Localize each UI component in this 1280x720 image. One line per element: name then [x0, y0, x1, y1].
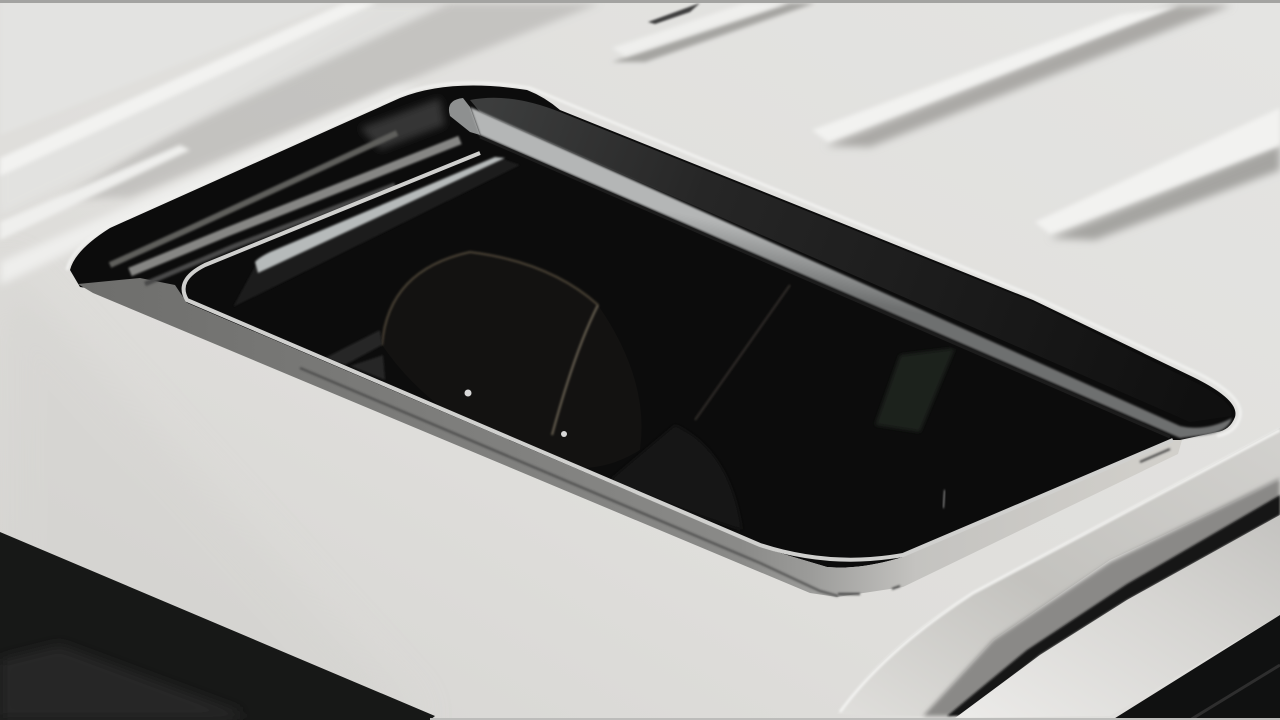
recess white rim: [67, 83, 1240, 436]
small interior glint: [943, 490, 945, 508]
lip dark line: [300, 368, 838, 596]
seat back: [610, 425, 742, 530]
sunroof opening: [67, 83, 1240, 597]
lower panel: [955, 515, 1280, 718]
seat side trim: [325, 330, 385, 380]
bar shadow line: [480, 137, 1170, 437]
rear mechanism haze: [360, 98, 445, 150]
bright inner trim: [184, 153, 1173, 560]
windshield: [0, 532, 435, 720]
cabin reflection panel: [875, 348, 955, 432]
mechanism rails: [110, 133, 460, 284]
deflector metal bar: [470, 107, 1232, 438]
top left roof ridge: [0, 0, 600, 285]
pillar line: [695, 285, 790, 420]
cabin interior: [325, 252, 955, 530]
dark recess: [70, 86, 1235, 568]
headrest: [381, 250, 600, 437]
frame screws: [838, 449, 1170, 594]
metal frame lower lip: [78, 278, 1182, 597]
dark sliding panel blade: [233, 158, 520, 307]
rail highlight: [840, 430, 1280, 712]
dark gap: [923, 478, 1280, 716]
roof rail: [837, 428, 1280, 720]
deflector rear curl: [449, 98, 480, 135]
sliding glass bar: [255, 157, 505, 273]
deflector glass: [470, 98, 1231, 422]
rail body: [837, 428, 1280, 716]
roof ribs: [612, 3, 1280, 240]
side window: [1112, 615, 1280, 720]
